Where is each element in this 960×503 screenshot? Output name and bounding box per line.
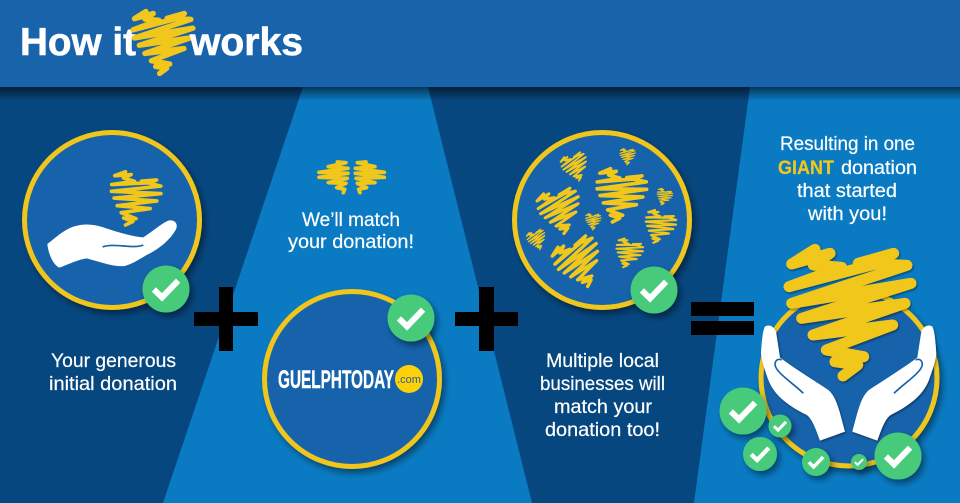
icon: check badge	[142, 266, 190, 312]
title: How it: How it	[20, 21, 136, 64]
text: multiple local businesses: donation too!	[545, 419, 660, 441]
logo: GuelphToday: .com	[397, 374, 421, 386]
header shadow	[0, 87, 960, 101]
text: multiple local businesses: match your	[554, 396, 653, 418]
panel: we'll match content	[264, 162, 440, 466]
title: works: works	[189, 21, 303, 64]
icon: giant heart	[789, 249, 911, 376]
plus sign 2	[455, 287, 518, 351]
icon: check badge	[630, 266, 678, 314]
header bar	[0, 0, 960, 87]
text: resulting: with you!	[807, 203, 887, 225]
icon: title heart	[133, 12, 193, 73]
panel: giant donation content	[720, 133, 937, 480]
logo: GuelphToday: GUELPHTODAY	[278, 366, 394, 394]
equals sign	[691, 302, 754, 335]
panel: giant donation	[694, 87, 960, 503]
text: we'll match: your donation!	[288, 231, 414, 253]
text: your generous: initial donation	[49, 373, 177, 395]
panel: we'll match	[163, 87, 532, 503]
panel: your donation	[24, 132, 200, 395]
icon: many hearts	[525, 149, 678, 295]
text: resulting: Resulting in one	[780, 133, 915, 155]
plus sign 1	[194, 287, 258, 351]
icon: check badges	[720, 388, 922, 480]
text: resulting	[778, 133, 917, 225]
icon: open hand	[47, 220, 177, 268]
icon: check badge	[388, 294, 434, 342]
text: multiple local businesses	[540, 350, 665, 441]
circle	[761, 290, 937, 466]
text: we'll match: We’ll match	[302, 209, 400, 231]
text: resulting: GIANT	[778, 157, 834, 179]
panel: local businesses	[514, 132, 690, 441]
text: your generous: Your generous	[51, 350, 176, 372]
text: we'll match	[288, 209, 414, 253]
circle	[514, 132, 690, 308]
circle	[264, 292, 440, 466]
text: multiple local businesses: Multiple local	[546, 350, 659, 372]
text: resulting: donation	[841, 157, 917, 179]
icon: two half hearts	[319, 162, 384, 193]
circle	[24, 132, 200, 308]
text: your generous	[49, 350, 177, 395]
icon: two hands	[761, 325, 936, 441]
icon: heart	[104, 169, 164, 231]
text: multiple local businesses: businesses will	[540, 373, 665, 395]
text: resulting: that started	[797, 180, 897, 202]
